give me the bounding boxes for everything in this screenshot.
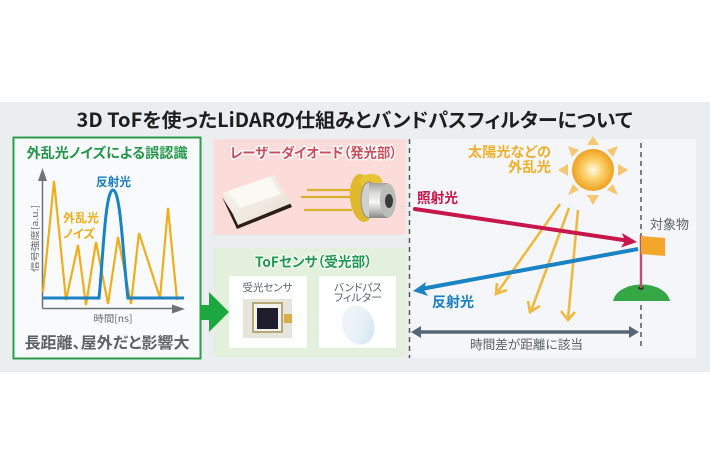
right dashed line (640, 143, 642, 350)
sensor label: 受光センサ (242, 280, 292, 295)
emitted light label: 照射光 (417, 188, 458, 208)
object label: 対象物 (650, 214, 689, 233)
x axis label: 時間[ns] (94, 311, 132, 325)
panel: laser diode (214, 139, 406, 235)
icon: sensor chip (243, 299, 292, 338)
noise label (63, 209, 99, 242)
time difference label: 時間差が距離に該当 (470, 334, 583, 353)
noise signal line (43, 181, 177, 305)
ambient light label (468, 142, 551, 177)
ambient light label: 太陽光などの (468, 142, 551, 162)
icon: sun (558, 136, 628, 205)
panel heading: 外乱光ノイズによる誤認識 (26, 143, 188, 163)
reflected light label: 反射光 (432, 292, 474, 312)
filter label (334, 280, 382, 305)
filter label: フィルター (334, 290, 382, 305)
arrow: to ToF sensor (200, 292, 229, 332)
reflected light arrow (413, 249, 638, 296)
panel conclusion: 長距離、屋外だと影響大 (24, 331, 190, 353)
panel: optical path (410, 136, 696, 358)
noise label: 外乱光 (63, 209, 99, 226)
emitted light arrow (415, 209, 637, 248)
card: light receiving sensor (229, 276, 307, 348)
title: 3D ToFを使ったLiDARの仕組みとバンドパスフィルターについて (76, 104, 633, 133)
ambient light label: 外乱光 (508, 157, 551, 177)
card: bandpass filter (319, 276, 396, 349)
icon: laser can (301, 173, 396, 223)
icon: flag on hill (613, 235, 670, 301)
icon: filter disc (336, 301, 380, 349)
icon: VCSEL package (222, 175, 292, 229)
ToF sensor heading: ToFセンサ（受光部） (255, 252, 372, 272)
noise label: ノイズ (63, 225, 95, 242)
panel: ToF sensor (214, 248, 406, 357)
left dashed line (408, 139, 410, 358)
filter label: バンドパス (334, 280, 382, 295)
background band (0, 102, 710, 372)
chart axes (38, 168, 185, 314)
reflected signal line (43, 190, 184, 298)
laser diode heading: レーザーダイオード（発光部） (230, 143, 397, 163)
ambient light arrows (496, 204, 578, 320)
signal chart (29, 168, 185, 325)
reflected light label: 反射光 (96, 173, 131, 190)
panel: misrecognition from ambient light noise (14, 138, 200, 358)
time difference arrow (411, 326, 639, 338)
y axis label: 信号強度[a.u.] (29, 205, 41, 272)
